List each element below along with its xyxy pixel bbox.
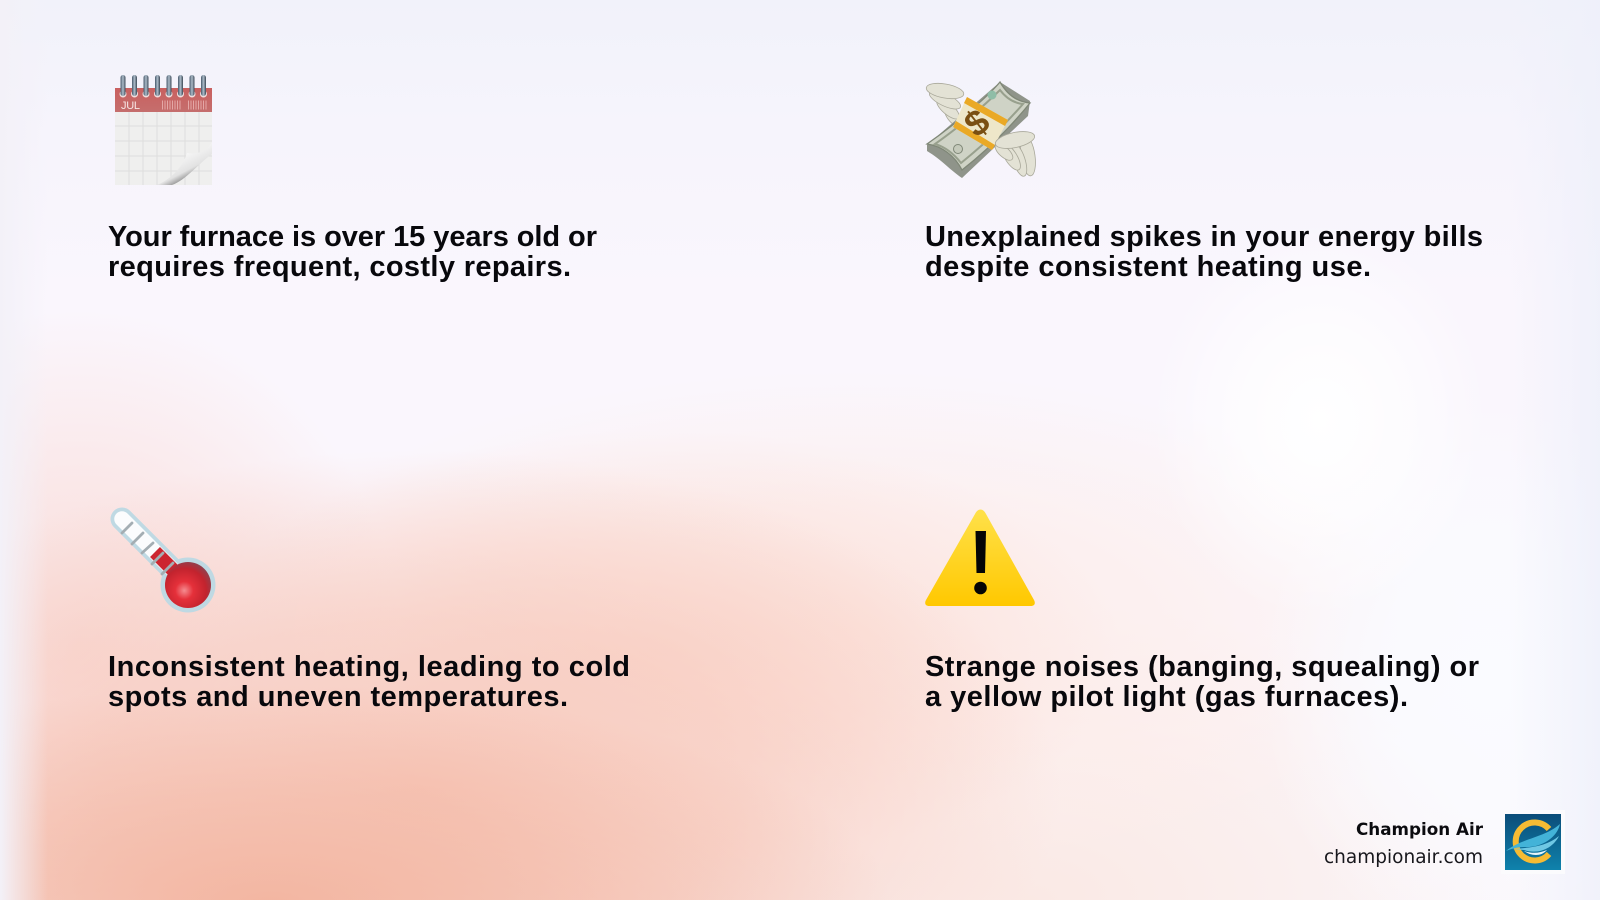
wing: lower right [992, 129, 1038, 178]
text: inconsistent heating: Inconsistent heating, leading to cold [108, 651, 630, 683]
text: inconsistent heating: spots and uneven temperatures. [108, 681, 568, 713]
text: furnace age: Your furnace is over 15 years old or [108, 221, 597, 253]
text: furnace age [108, 221, 597, 283]
icon: money with wings [925, 81, 1038, 178]
text: strange noises: Strange noises (banging, squealing) or [925, 651, 1479, 683]
brand: Champion Air footer [1324, 820, 1484, 868]
text: energy bills [925, 221, 1483, 283]
brand: Champion Air footer: championair.com [1324, 846, 1483, 868]
icon: thermometer [122, 519, 216, 612]
text: energy bills: Unexplained spikes in your energy bills [925, 221, 1483, 253]
brand: Champion Air footer: Champion Air [1356, 820, 1484, 840]
text: inconsistent heating [108, 651, 630, 713]
icon: Champion Air logo [1501, 810, 1565, 874]
dollar sign: $ [956, 100, 997, 145]
bill stack [927, 82, 1030, 178]
icon: calendar: JUL [121, 100, 140, 112]
wing: upper left [925, 81, 965, 128]
text: energy bills: despite consistent heating use. [925, 251, 1371, 283]
icon: warning sign [925, 510, 1035, 606]
text: strange noises [925, 651, 1479, 713]
band [953, 97, 1008, 150]
text: furnace age: requires frequent, costly repairs. [108, 251, 571, 283]
icon: calendar [115, 75, 212, 185]
text: strange noises: a yellow pilot light (gas furnaces). [925, 681, 1408, 713]
